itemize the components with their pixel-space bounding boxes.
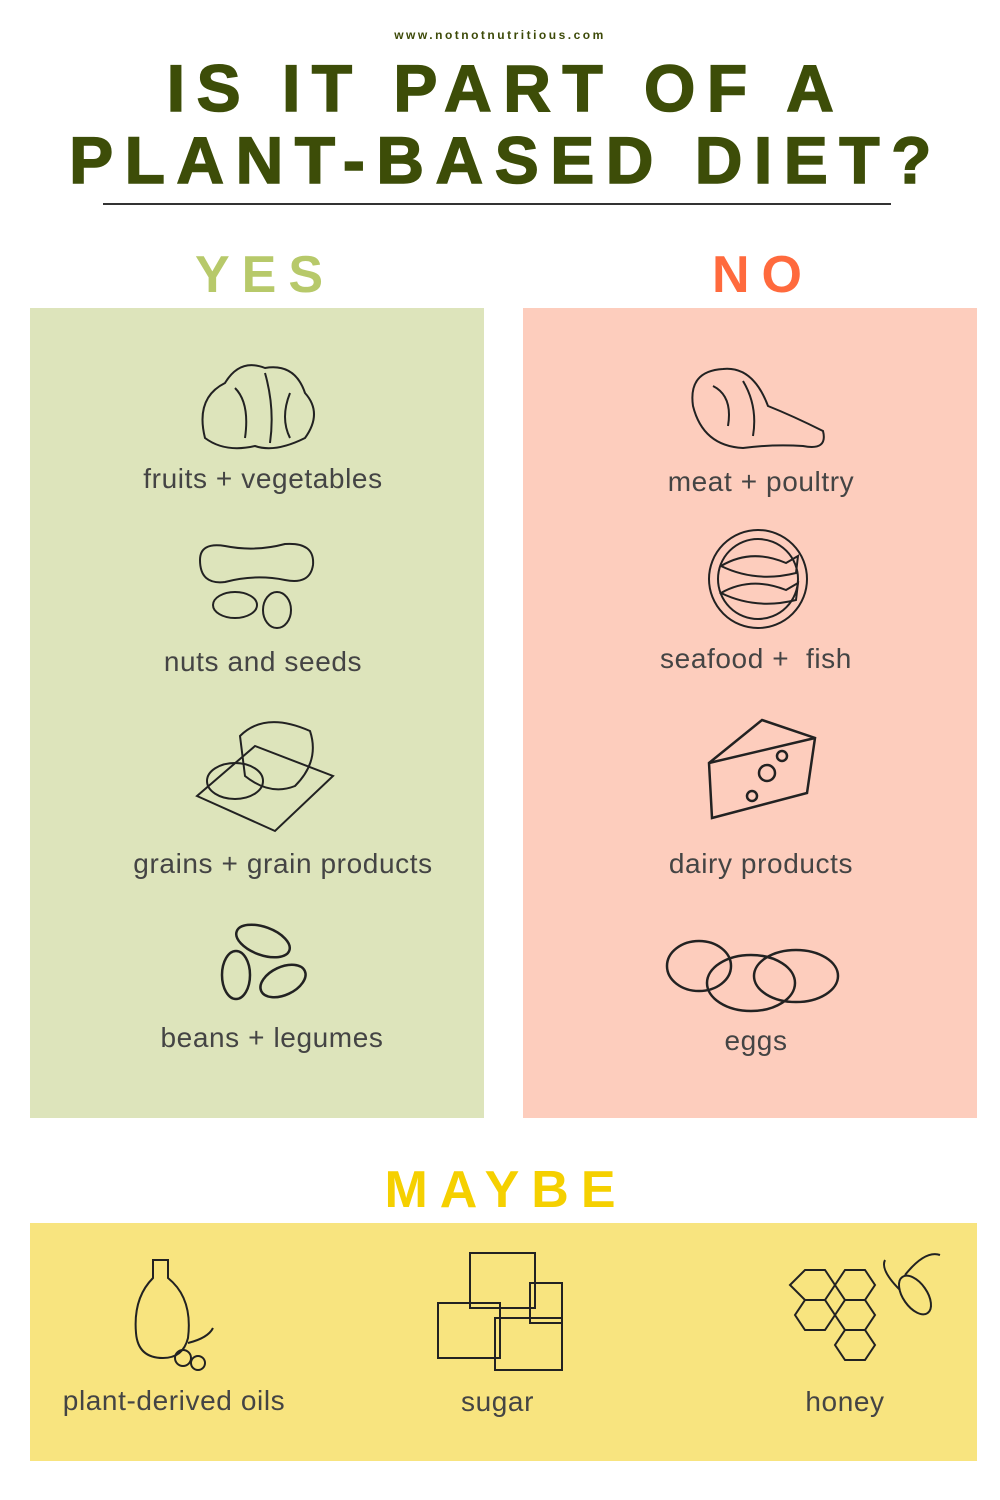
icon: eggs <box>666 940 840 1012</box>
label: fruits + vegetables: fruits + vegetables <box>143 463 383 494</box>
icon: oil jar <box>134 1259 214 1371</box>
title: IS IT PART OF A <box>167 51 845 125</box>
label: sugar: sugar <box>461 1386 534 1417</box>
panel: maybe <box>30 1223 977 1461</box>
icon: fish plate <box>708 529 808 629</box>
heading: yes: YES <box>195 246 335 304</box>
heading: no: NO <box>712 246 814 304</box>
label: grains: grains + grain products <box>133 848 433 879</box>
label: plant-derived oils: plant-derived oils <box>63 1385 285 1416</box>
website url: www.notnotnutritious.com <box>394 28 606 42</box>
icon: meat <box>691 368 825 449</box>
label: beans: beans + legumes <box>160 1022 384 1053</box>
title: PLANT-BASED DIET? <box>69 123 943 197</box>
icon: lettuce <box>202 364 315 450</box>
label: eggs: eggs <box>724 1025 788 1056</box>
title <box>69 51 943 197</box>
icon: peanuts <box>199 542 314 629</box>
title underline <box>103 203 891 205</box>
icon: sugar cubes <box>437 1252 563 1371</box>
icon: cheese <box>708 718 816 820</box>
label: nuts and seeds: nuts and seeds <box>164 646 362 677</box>
icon: honeycomb and bee <box>788 1253 940 1361</box>
label: seafood + fish: seafood + fish <box>660 643 852 674</box>
heading: maybe: MAYBE <box>384 1161 628 1219</box>
label: meat + poultry: meat + poultry <box>668 466 854 497</box>
panel: yes <box>30 308 484 1118</box>
label: honey: honey <box>805 1386 885 1417</box>
icon: bread <box>195 721 335 832</box>
panel: no <box>523 308 977 1118</box>
label: dairy products: dairy products <box>669 848 853 879</box>
icon: beans <box>220 924 307 1000</box>
